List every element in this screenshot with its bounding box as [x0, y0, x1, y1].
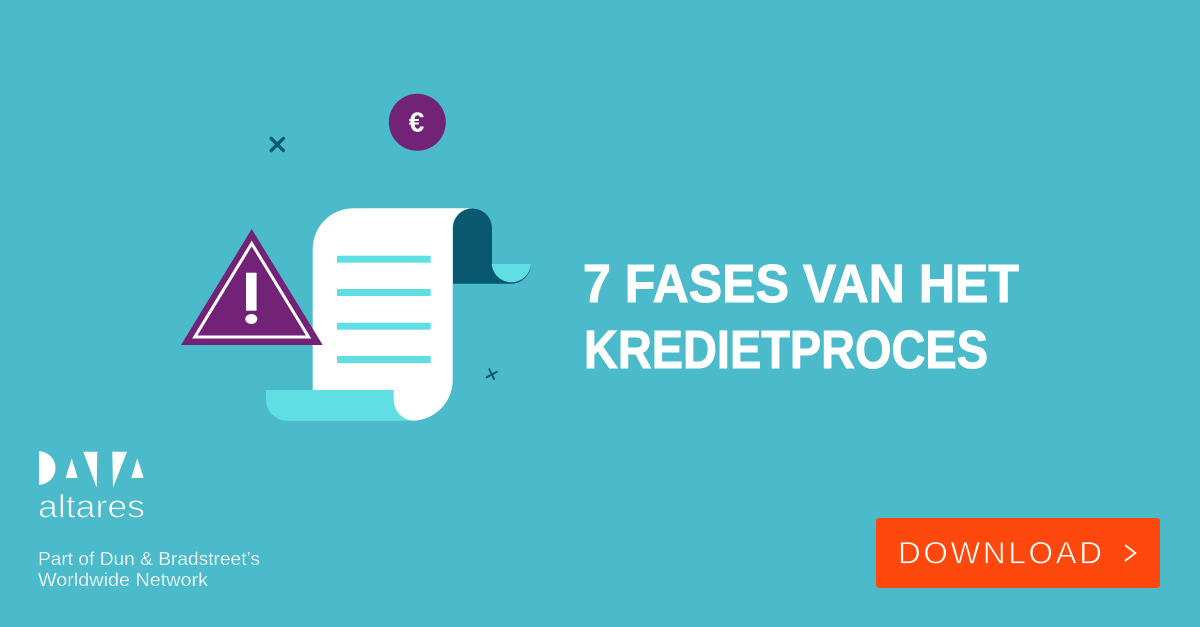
scroll paper: [313, 208, 472, 421]
scroll bottom curl: [266, 390, 414, 421]
title: 7 FASES VAN HET: [583, 254, 1019, 314]
tagline: Worldwide Network: [38, 569, 209, 590]
scroll top curl: [453, 208, 531, 284]
logo wordmark: altares: [38, 488, 145, 524]
icon: euro coin: [389, 94, 446, 151]
logo mark: DATA: [39, 451, 144, 488]
title: [583, 254, 1019, 380]
download button: [876, 518, 1160, 588]
icon: warning triangle: [181, 229, 323, 345]
tagline: [38, 548, 260, 590]
tagline: Part of Dun & Bradstreet’s: [38, 548, 260, 569]
title: KREDIETPROCES: [584, 320, 988, 380]
icon: chevron: [1125, 545, 1135, 561]
icon: document scroll: [266, 208, 531, 421]
document text lines: [337, 256, 431, 363]
icon: euro coin: €: [409, 106, 425, 138]
icon: small cross: [487, 369, 497, 379]
scroll curl underside: [492, 264, 531, 282]
download button: DOWNLOAD: [898, 535, 1102, 571]
logo: Data altares: [38, 451, 145, 524]
icon: large cross: [271, 138, 283, 151]
